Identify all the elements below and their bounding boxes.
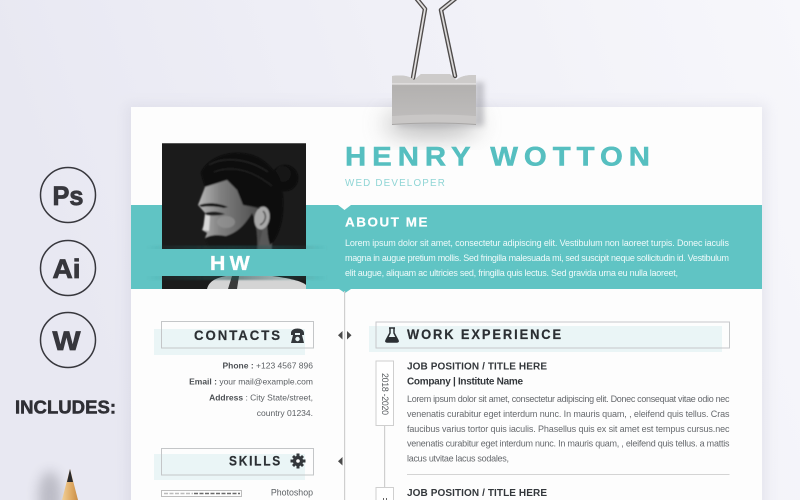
icon: word badge: W [52, 326, 81, 356]
binder clip [392, 0, 484, 126]
date box: first job: 2018 -2020 [380, 373, 390, 415]
company: Company | Institute Name [407, 376, 523, 388]
center timeline line [344, 291, 345, 500]
icon: photoshop badge: Ps [52, 181, 84, 211]
icon: gear [290, 454, 306, 468]
paper shadow [126, 104, 767, 500]
hair [201, 153, 283, 245]
clip wires [413, 0, 456, 78]
about paragraph: elit augue, aliquam ac ultricies sed, fringilla quis lectus. Sed gravida urna eu nulla laoreet, [345, 268, 678, 278]
job entry: first [407, 362, 730, 464]
icon: illustrator badge: Ai [52, 254, 80, 284]
panel: work experience heading: WORK EXPERIENCE [407, 327, 563, 342]
job description: faucibus varius tortor quis iaculis. Phasellus quis ex sit amet est tempus cursus.nec [407, 424, 730, 434]
panel: contact details [189, 360, 313, 418]
panel: skills heading [154, 448, 314, 480]
includes label: INCLUDES: [15, 398, 116, 418]
job description [407, 394, 730, 464]
brow [199, 203, 228, 208]
panel: contact details: Phone : +123 4567 896 [222, 360, 313, 370]
date box: first job [376, 361, 394, 426]
eye [205, 212, 225, 216]
panel: contact details: Email : your mail@example.com [189, 376, 313, 386]
job description: lacus utvitae lacus sodales, [407, 454, 509, 464]
initials: HW [210, 253, 254, 275]
name ribbon [146, 246, 328, 280]
skill row: photoshop [162, 488, 313, 498]
panel: contact details: country 01234. [257, 408, 313, 418]
panel: contacts heading [154, 322, 314, 355]
arrow markers: contacts [338, 331, 352, 340]
clip cast shadow [398, 82, 484, 126]
job title: second: JOB POSITION / TITLE HERE [407, 488, 547, 499]
about paragraph: magna in augue pretium mollis. Sed fringilla malesuada mi, sed suscipit neque sollicitudin id. Vestibulum [345, 253, 729, 263]
teal about band [131, 205, 762, 293]
skill row: photoshop: Photoshop [271, 488, 313, 498]
about me block [345, 214, 730, 278]
bun [272, 165, 298, 191]
date box: second job [376, 488, 394, 500]
panel: contacts heading: CONTACTS [194, 328, 282, 343]
job title: JOB POSITION / TITLE HERE [407, 362, 547, 372]
job description: Lorem ipsum dolor sit amet, consectetur adipiscing elit. Donec consequat vitae odio nec [407, 394, 730, 404]
icon: word badge [40, 312, 96, 368]
arrow marker: skills [338, 457, 342, 466]
face [198, 180, 262, 250]
job description: venenatis curabitur eget interdum nunc. In mauris quam, , eleifend quis tellus. Cras [407, 409, 730, 419]
nose highlight [203, 214, 210, 231]
beard [205, 213, 257, 250]
icon: photoshop badge [40, 168, 96, 222]
about paragraph [345, 238, 730, 278]
paper sheet [131, 107, 762, 500]
title: name: HENRY WOTTON [345, 142, 656, 172]
clip body [392, 74, 476, 125]
pencil [38, 469, 78, 500]
clip shadow on paper [384, 111, 480, 137]
icon: flask [386, 328, 398, 342]
ear [253, 205, 271, 231]
about paragraph: Lorem ipsum dolor sit amet, consectetur adipiscing elit. Vestibulum non laoreet turpis. Donec iaculis [345, 238, 730, 248]
job description: venenatis curabitur eget interdum nunc. In mauris quam, , eleifend quis tellus. a mattis [407, 438, 730, 448]
shirt [207, 276, 306, 289]
cheek highlight [217, 216, 235, 228]
subtitle: role: WED DEVELOPER [345, 178, 446, 189]
job divider [407, 474, 730, 475]
neck [258, 225, 273, 249]
panel: skills heading: SKILLS [229, 454, 282, 468]
portrait photo [162, 143, 306, 289]
panel: work experience heading [369, 322, 730, 352]
timeline connector [384, 425, 385, 487]
icon: telephone [291, 328, 304, 343]
panel: contact details: Address : City State/street, [209, 392, 313, 402]
icon: illustrator badge [40, 240, 96, 296]
about heading: ABOUT ME [345, 214, 429, 230]
